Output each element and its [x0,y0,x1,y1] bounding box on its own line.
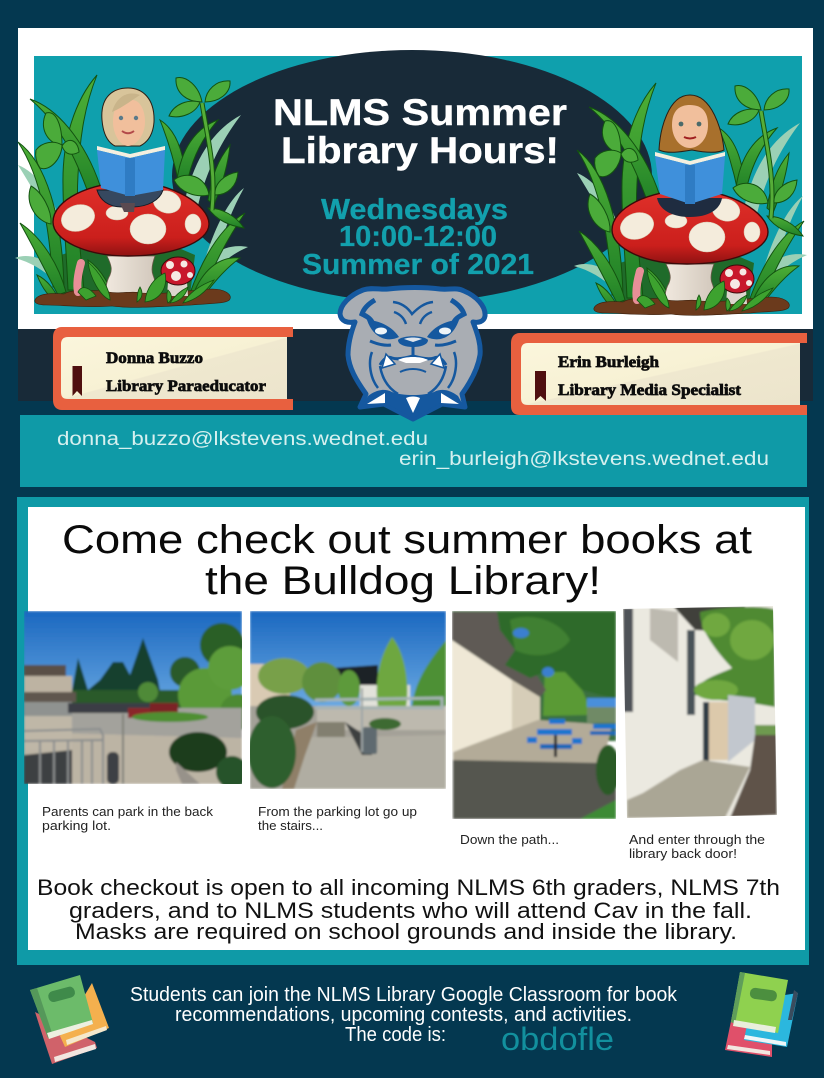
photo: parking lot [24,611,256,788]
dark oval [172,50,652,302]
footer message: recommendations, upcoming contests, and activities. [175,1004,632,1026]
caption: parking: parking lot. [42,818,111,833]
name and role: Donna Buzzo [106,350,203,367]
email: Donna: donna_buzzo@lkstevens.wednet.edu [57,429,428,450]
heading: the Bulldog Library! [205,559,601,603]
left bitmoji [97,88,165,212]
photo: stairs [248,611,446,789]
bookmark ribbon [535,371,546,401]
classroom code: obdofle [501,1021,614,1057]
name and role: Library Paraeducator [106,378,266,395]
schedule: Summer of 2021 [302,249,534,281]
name and role: Erin Burleigh [558,354,659,371]
caption: parking: Parents can park in the back [42,804,214,819]
checkout information: Masks are required on school grounds and inside the library. [75,919,737,944]
email: Erin: erin_burleigh@lkstevens.wednet.edu [399,449,769,470]
caption: door: library back door! [629,846,737,861]
teal email bar [20,415,807,487]
name card: Erin Burleigh [511,333,807,415]
icon: right book stack [725,972,798,1057]
photo: path [452,611,620,819]
checkout information: graders, and to NLMS students who will attend Cav in the fall. [69,898,752,923]
teal banner [34,56,802,314]
icon: bulldog mascot [340,288,485,419]
icon: left book stack [30,975,109,1064]
checkout information: Book checkout is open to all incoming NLMS 6th graders, NLMS 7th [37,875,780,900]
name card: Donna Buzzo [53,327,293,410]
white card [28,507,805,950]
left illustration: librarian on mushroom [15,75,248,307]
caption: path: Down the path... [460,832,559,847]
heading: Come check out summer books at [62,518,752,562]
footer message: The code is: [345,1024,446,1046]
caption: stairs: the stairs... [258,818,323,833]
title: Library Hours! [281,130,559,171]
panel: summer books [17,497,809,965]
title: NLMS Summer [273,92,567,133]
photo: back door [620,604,780,820]
right bitmoji [655,95,725,217]
schedule: Wednesdays [321,194,508,226]
footer message: Students can join the NLMS Library Google Classroom for book [130,984,678,1006]
caption: stairs: From the parking lot go up [258,804,417,819]
contact email panel [20,415,807,487]
teal frame [17,497,809,965]
bookmark ribbon [72,366,82,396]
right illustration: librarian on mushroom [574,83,807,315]
header panel [15,28,813,329]
footer [30,972,798,1064]
caption: door: And enter through the [629,832,765,847]
staff band [18,329,813,401]
schedule: 10:00-12:00 [339,221,497,253]
name and role: Library Media Specialist [558,382,742,399]
white header frame [18,28,813,329]
